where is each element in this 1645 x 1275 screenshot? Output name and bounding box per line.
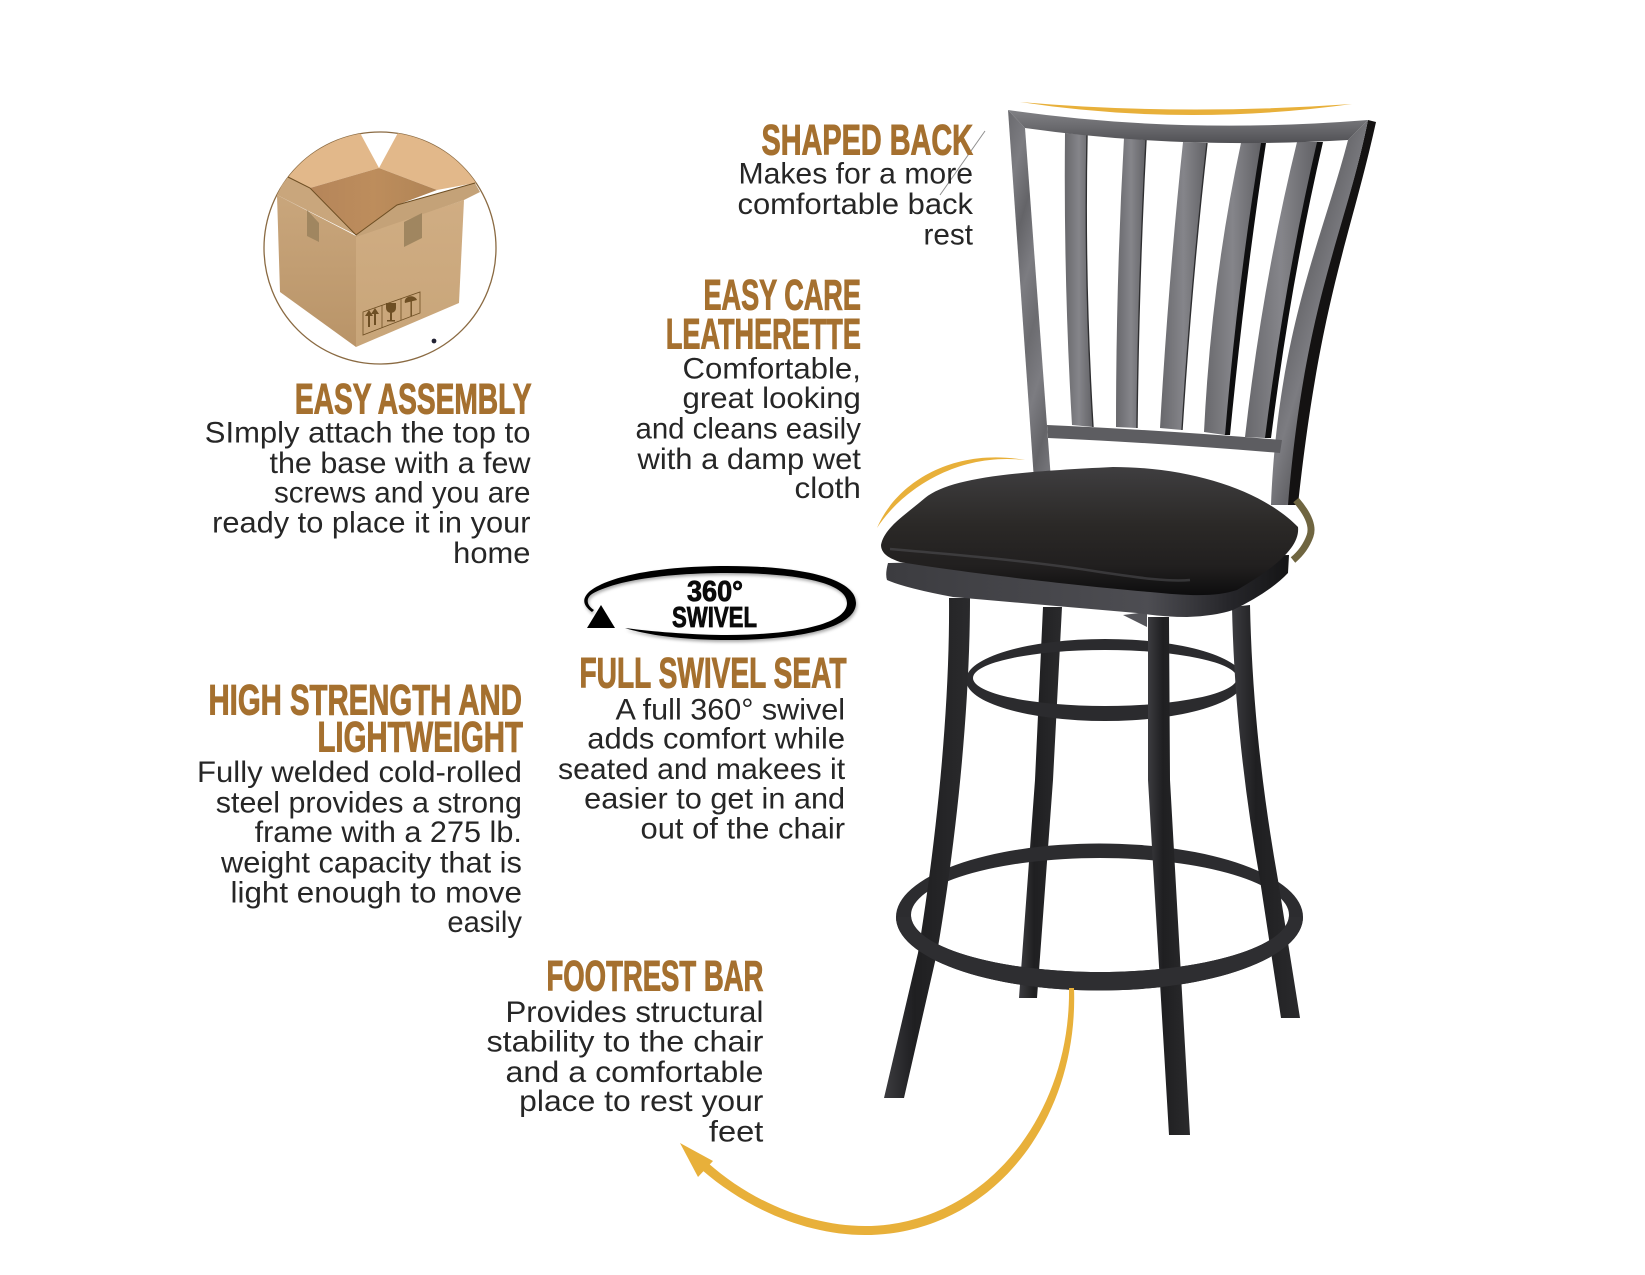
- body: footrest bar: and a comfortable: [506, 1056, 763, 1089]
- heading: high strength and lightweight: [208, 676, 523, 762]
- body: easy assembly: screws and you are: [274, 476, 530, 509]
- upper ring: [966, 639, 1244, 721]
- body: full swivel seat: [558, 693, 846, 846]
- body: shaped back: [738, 158, 974, 252]
- footrest front arc: [896, 917, 1303, 990]
- body: full swivel seat: seated and makees it: [558, 753, 846, 786]
- arrow: seat accent: [877, 457, 1025, 528]
- body: full swivel seat: easier to get in and: [584, 782, 845, 815]
- lower rail: [1047, 425, 1282, 453]
- slat 2: [1116, 138, 1146, 428]
- body: easy assembly: the base with a few: [270, 447, 531, 480]
- chair: [881, 110, 1376, 1135]
- body: footrest bar: stability to the chair: [486, 1025, 763, 1058]
- top rail: [1008, 110, 1368, 143]
- front legs: [884, 598, 970, 1098]
- text: full swivel seat: [558, 649, 846, 846]
- icon: 360 swivel badge: [584, 566, 856, 640]
- body: shaped back: rest: [924, 218, 974, 251]
- heading: easy care leatherette: LEATHERETTE: [666, 310, 861, 358]
- body: shaped back: Makes for a more: [738, 158, 973, 191]
- heading: full swivel seat: FULL SWIVEL SEAT: [580, 649, 846, 697]
- body: footrest bar: feet: [709, 1116, 764, 1149]
- seat cushion: [881, 467, 1298, 595]
- slat 5: [1264, 142, 1323, 438]
- body: easy assembly: [205, 416, 531, 570]
- body: high strength and lightweight: steel provides a strong: [216, 786, 522, 819]
- body: easy care leatherette: [636, 352, 862, 505]
- heading: high strength and lightweight: HIGH STRENGTH AND: [208, 676, 522, 724]
- arrow: shaped back accent: [1020, 102, 1352, 115]
- footrest ring: [896, 844, 1303, 990]
- back legs: [1019, 607, 1062, 998]
- slat 3: [1160, 142, 1207, 430]
- heading: easy care leatherette: EASY CARE: [704, 271, 861, 319]
- slat 4: [1224, 143, 1266, 435]
- body: high strength and lightweight: easily: [447, 906, 522, 939]
- body: easy assembly: ready to place it in your: [212, 507, 531, 540]
- icon: 360 swivel badge: 360°: [687, 576, 743, 608]
- body: full swivel seat: adds comfort while: [587, 722, 845, 755]
- infographic canvas: [200, 102, 1376, 1235]
- body: full swivel seat: A full 360° swivel: [616, 693, 845, 726]
- body: easy care leatherette: and cleans easily: [636, 412, 861, 445]
- arrow: footrest bar: [680, 988, 1074, 1235]
- body: high strength and lightweight: frame with a 275 lb.: [255, 816, 522, 849]
- icon: cardboard box in circle: [263, 131, 497, 365]
- body: easy care leatherette: cloth: [794, 472, 861, 505]
- slat 1: [1065, 133, 1093, 427]
- swivel plate: [1123, 612, 1147, 627]
- heading: shaped back: SHAPED BACK: [762, 116, 973, 164]
- body: easy care leatherette: great looking: [682, 382, 861, 415]
- heading: easy care leatherette: [666, 271, 861, 358]
- heading: easy assembly: EASY ASSEMBLY: [295, 375, 532, 423]
- seat band: [886, 555, 1289, 617]
- body: full swivel seat: out of the chair: [640, 813, 845, 846]
- text: easy care leatherette: [636, 271, 862, 505]
- body: easy care leatherette: with a damp wet: [636, 443, 862, 476]
- heading: footrest bar: FOOTREST BAR: [546, 953, 763, 1001]
- body: high strength and lightweight: weight capacity that is: [220, 846, 522, 879]
- shaped back frame: [1008, 110, 1376, 505]
- body: footrest bar: Provides structural: [506, 996, 763, 1029]
- text: easy assembly: [205, 375, 532, 570]
- text: high strength and lightweight: [197, 676, 523, 939]
- pointer line: [940, 131, 985, 195]
- icon: 360 swivel badge: SWIVEL: [672, 602, 757, 634]
- heading: high strength and lightweight: LIGHTWEIGHT: [318, 714, 523, 762]
- body: easy assembly: SImply attach the top to: [205, 416, 531, 449]
- body: high strength and lightweight: Fully welded cold-rolled: [197, 756, 522, 789]
- text: footrest bar: [486, 953, 764, 1149]
- body: easy care leatherette: Comfortable,: [682, 352, 861, 385]
- body: footrest bar: [486, 996, 764, 1149]
- brass bracket: [1293, 500, 1311, 560]
- body: easy assembly: home: [453, 537, 530, 570]
- body: high strength and lightweight: [197, 756, 522, 939]
- text: shaped back: [738, 116, 974, 252]
- body: high strength and lightweight: light enough to move: [230, 877, 522, 910]
- body: shaped back: comfortable back: [738, 188, 974, 221]
- body: footrest bar: place to rest your: [519, 1085, 763, 1118]
